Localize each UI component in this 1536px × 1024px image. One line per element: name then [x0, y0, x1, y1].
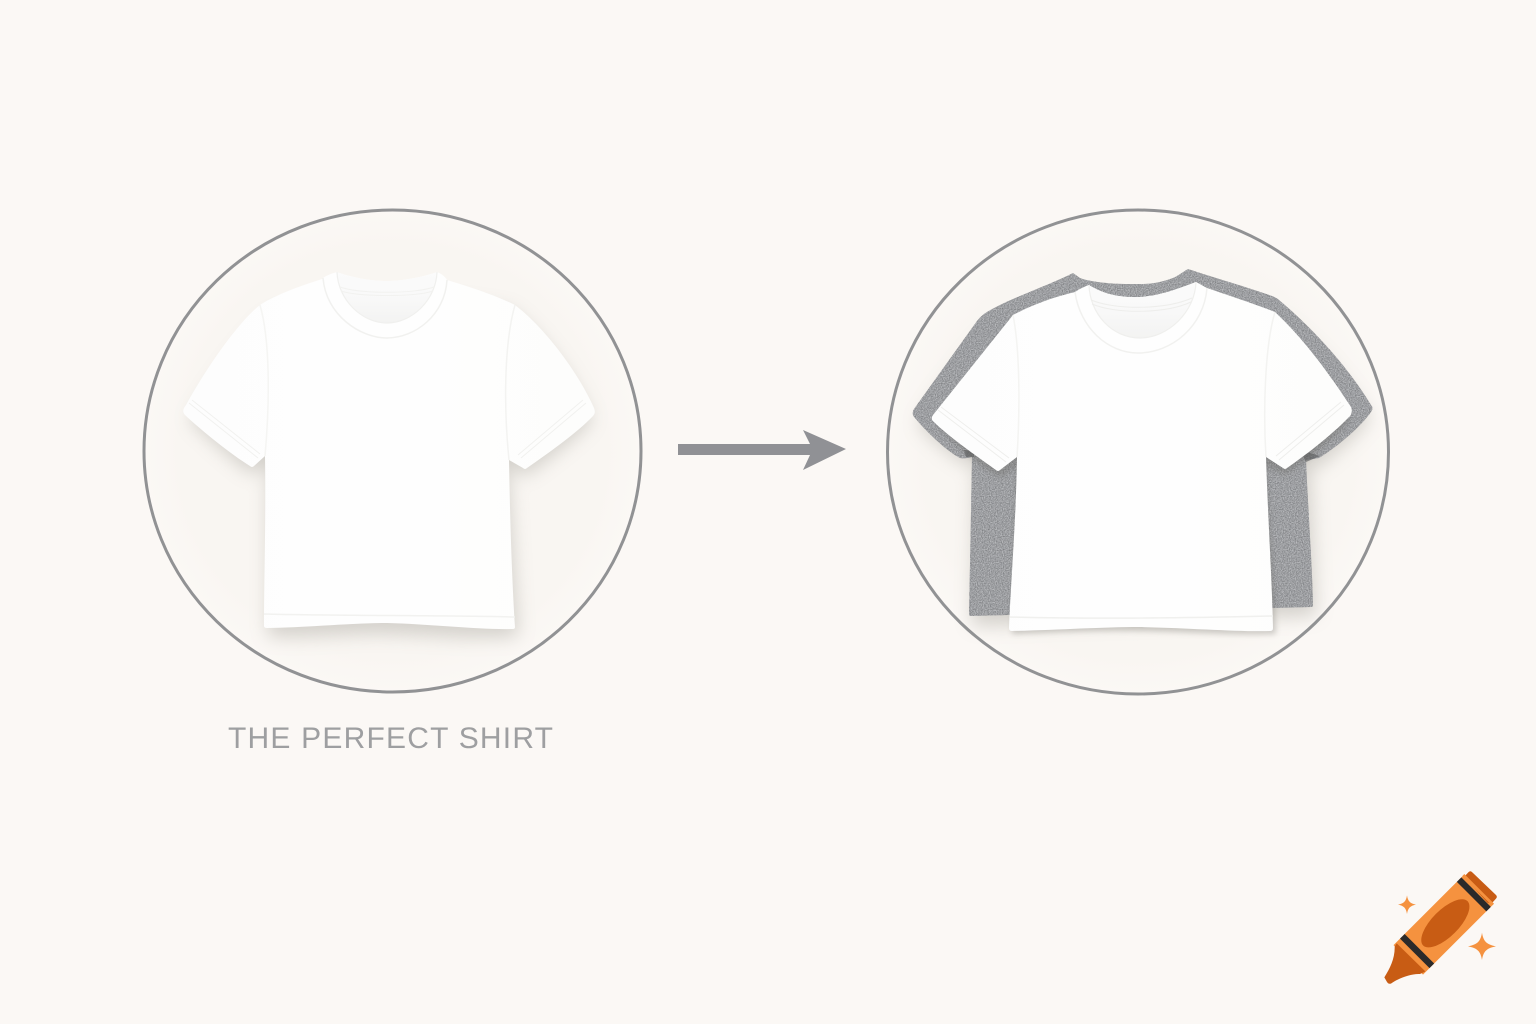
- icon: large sparkle: [1468, 933, 1496, 960]
- panel: single perfect shirt: [144, 210, 641, 692]
- icon: white t-shirt front: [932, 282, 1352, 635]
- armpit shadow: [964, 450, 1320, 462]
- circle outline: right: [888, 210, 1388, 694]
- icon: grey t-shirt: [913, 269, 1372, 626]
- icon: small sparkle: [1398, 895, 1416, 914]
- circle outline: left: [144, 210, 641, 692]
- caption: the perfect shirt: THE PERFECT SHIRT: [228, 722, 553, 755]
- panel: white shirt layered over grey shirt: [888, 210, 1388, 694]
- arrow: [678, 430, 846, 470]
- icon: orange crayon logo: [1384, 871, 1497, 984]
- icon: white t-shirt: [183, 272, 595, 638]
